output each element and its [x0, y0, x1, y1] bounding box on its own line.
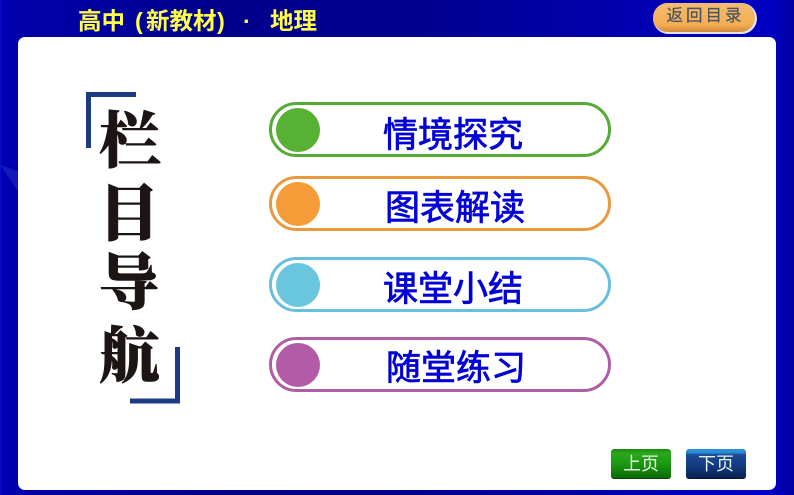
menu dot 1	[276, 108, 320, 152]
heading char 栏: 栏	[99, 109, 160, 176]
menu item 2	[269, 176, 611, 231]
header title: 新教材	[146, 8, 216, 34]
return button face	[653, 3, 755, 32]
header title: ·	[243, 8, 251, 34]
header title: (	[135, 8, 143, 34]
next page button	[686, 449, 746, 479]
menu label 1: 情境探究	[383, 116, 523, 155]
background light streak	[0, 165, 18, 191]
menu item 4	[269, 337, 611, 392]
menu label 4: 随堂练习	[386, 349, 526, 388]
heading char 导: 导	[98, 251, 160, 318]
menu dot 3	[276, 263, 320, 307]
heading char 航: 航	[98, 324, 160, 391]
previous page button: 上页	[623, 454, 659, 474]
previous page button	[611, 449, 671, 479]
heading char 目: 目	[98, 182, 160, 249]
header title	[78, 8, 317, 34]
icon: top left bracket	[86, 92, 136, 148]
header title: )	[217, 8, 225, 34]
icon: bottom right bracket	[130, 347, 180, 404]
menu dot 4	[276, 343, 320, 387]
header title: 高中	[78, 8, 125, 34]
heading: 栏目导航	[98, 109, 161, 391]
next page button: 下页	[698, 454, 734, 474]
header title: 地理	[270, 8, 317, 34]
return button	[653, 3, 757, 34]
menu label 2: 图表解读	[385, 189, 525, 228]
menu dot 2	[276, 182, 320, 226]
menu item 3	[269, 257, 611, 312]
return button face: 返回目录	[666, 7, 744, 25]
menu item 1	[269, 102, 611, 157]
menu label 3: 课堂小结	[383, 270, 523, 309]
